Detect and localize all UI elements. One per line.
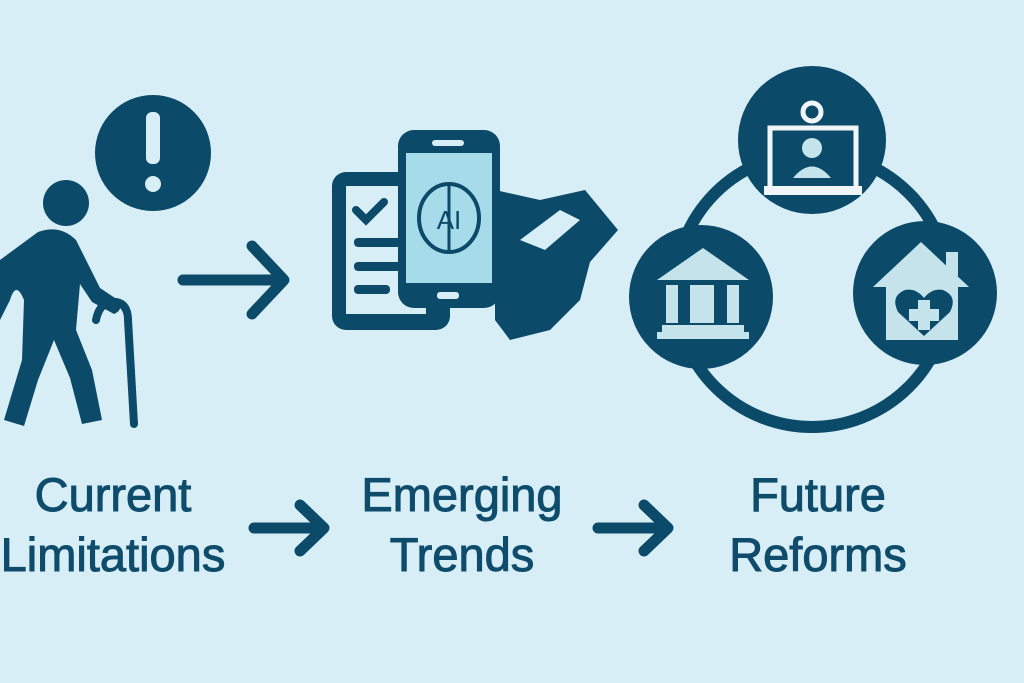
label: Future Reforms: Reforms xyxy=(729,528,907,581)
icon: phone with AI brain xyxy=(398,130,500,308)
label: Future Reforms xyxy=(729,468,907,581)
icon: laptop video xyxy=(764,103,862,195)
icon: exclamation xyxy=(95,95,211,211)
icon: handshake xyxy=(495,190,618,340)
diagram: reform cycle xyxy=(629,66,997,427)
label: Emerging Trends: Trends xyxy=(390,528,534,581)
arrow: bottom 1 xyxy=(254,505,324,551)
label: Emerging Trends xyxy=(361,468,563,581)
label: Current Limitations: Limitations xyxy=(1,528,225,581)
label: Current Limitations: Current xyxy=(35,468,191,521)
arrow: bottom 2 xyxy=(598,505,668,551)
label: Future Reforms: Future xyxy=(750,468,886,521)
icon: phone with AI brain: AI xyxy=(437,205,461,235)
arrow: top 1 xyxy=(183,246,284,314)
icon: bank building xyxy=(657,248,749,339)
icon: tablet xyxy=(332,172,450,330)
label: Emerging Trends: Emerging xyxy=(361,468,563,521)
label: Current Limitations xyxy=(1,468,225,581)
icon: elderly person xyxy=(0,180,134,426)
icon: house with heart xyxy=(873,242,969,340)
